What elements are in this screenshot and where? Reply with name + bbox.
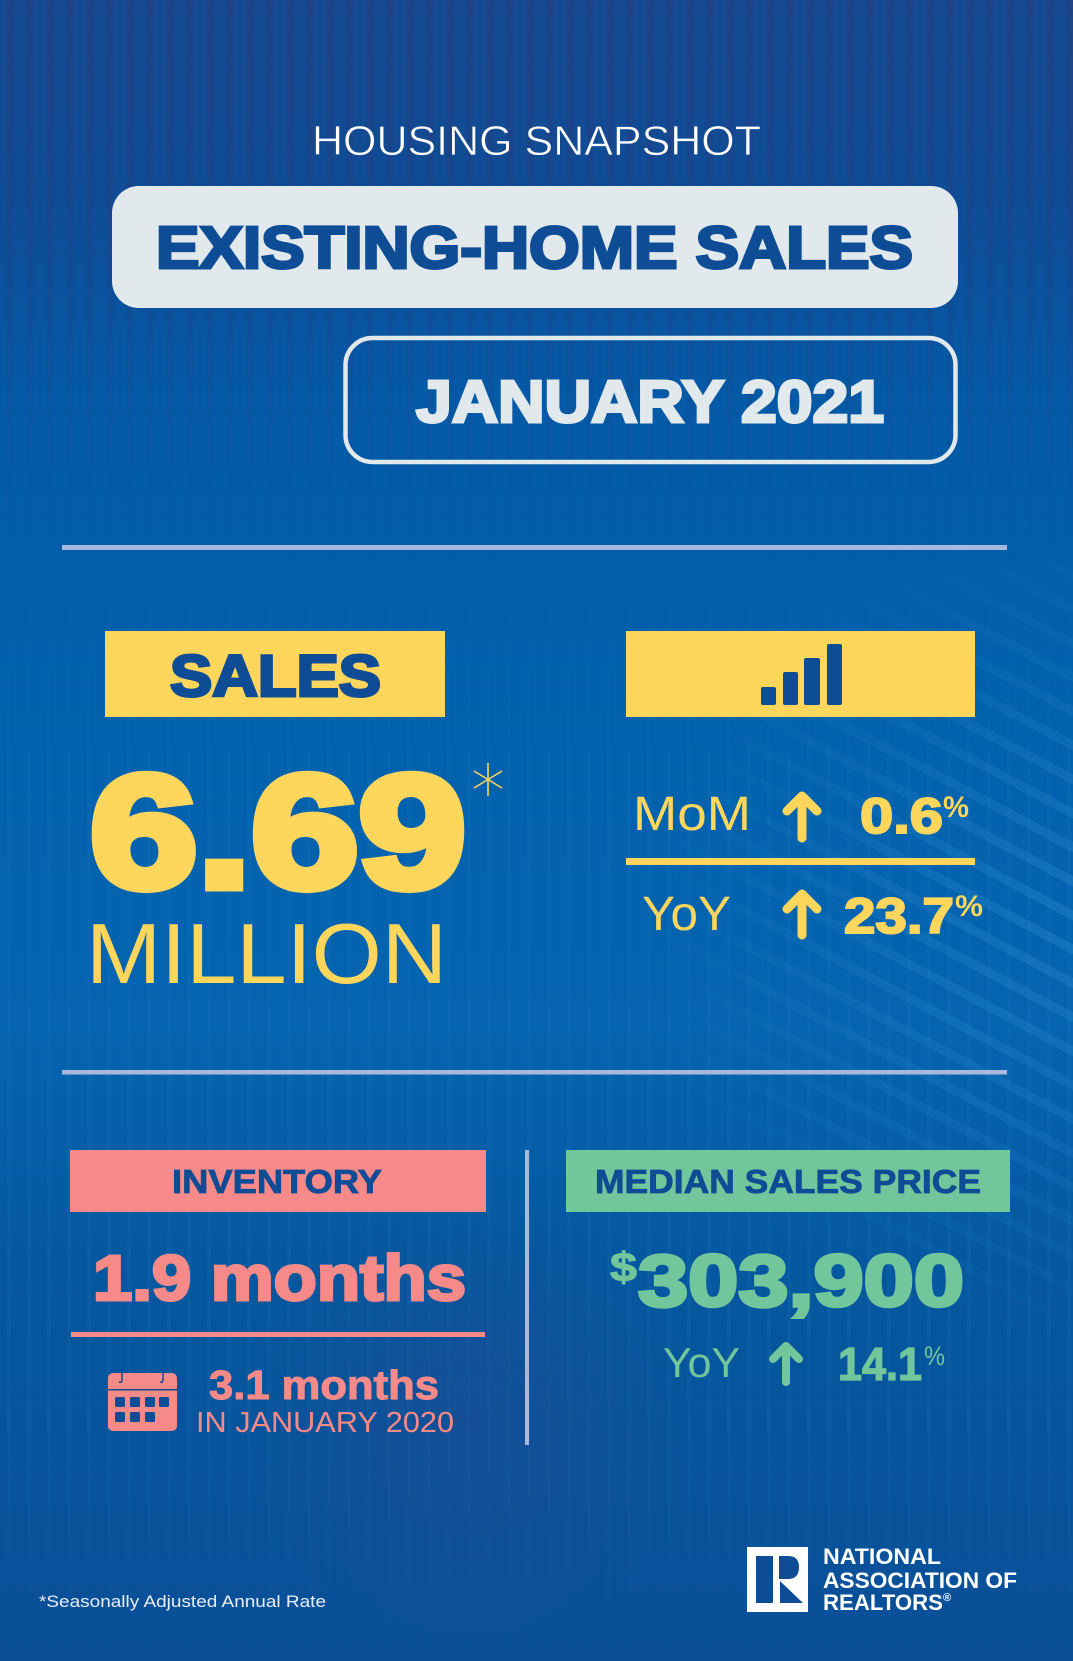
footnote: *Seasonally Adjusted Annual Rate bbox=[39, 1593, 326, 1611]
prior year value: 3.1 months bbox=[209, 1362, 439, 1408]
title pill: existing-home sales bbox=[112, 186, 958, 308]
sales label: SALES bbox=[170, 644, 381, 709]
date pill: january 2021: JANUARY 2021 bbox=[416, 369, 884, 435]
yoy row: 14.1 bbox=[838, 1338, 922, 1390]
prior year label: IN JANUARY 2020 bbox=[196, 1407, 454, 1439]
mom row: MoM bbox=[633, 788, 751, 841]
yoy row: YoY bbox=[642, 888, 731, 941]
divider middle bbox=[62, 1070, 1007, 1074]
heading: housing snapshot: HOUSING SNAPSHOT bbox=[312, 117, 761, 164]
median price label: MEDIAN SALES PRICE bbox=[595, 1163, 981, 1200]
yoy row bbox=[642, 888, 983, 944]
median price label bbox=[566, 1150, 1010, 1212]
sales value: 6.69 bbox=[90, 742, 466, 921]
panel: sales bbox=[86, 631, 502, 1002]
yoy row: % bbox=[955, 890, 983, 923]
inventory value: 1.9 months bbox=[93, 1242, 466, 1314]
icon: calendar bbox=[108, 1371, 177, 1431]
rule bbox=[71, 1332, 485, 1337]
yoy row: YoY bbox=[663, 1339, 740, 1386]
title pill: existing-home sales: EXISTING-HOME SALES bbox=[156, 215, 913, 281]
wordmark: ® bbox=[943, 1592, 951, 1604]
yoy row bbox=[663, 1338, 945, 1390]
vertical divider bbox=[525, 1150, 529, 1445]
panel: inventory bbox=[70, 1150, 486, 1439]
chart icon box bbox=[626, 631, 975, 717]
million label: MILLION bbox=[86, 907, 447, 1002]
panel: median sales price bbox=[566, 1150, 1010, 1390]
asterisk bbox=[474, 763, 502, 796]
date pill: january 2021 bbox=[346, 338, 956, 462]
dollar sign: $ bbox=[610, 1244, 637, 1290]
mom row: 0.6 bbox=[860, 788, 943, 844]
divider top bbox=[62, 545, 1007, 550]
mom row: % bbox=[943, 791, 969, 824]
icon: realtor r bbox=[747, 1547, 808, 1612]
panel: change rates bbox=[626, 631, 983, 944]
wordmark: REALTORS bbox=[823, 1590, 943, 1615]
yoy row: 23.7 bbox=[844, 888, 954, 944]
price value: 303,900 bbox=[638, 1241, 964, 1322]
sales label bbox=[105, 631, 445, 717]
yoy row: % bbox=[924, 1341, 945, 1371]
wordmark: ASSOCIATION OF bbox=[823, 1568, 1017, 1593]
inventory label bbox=[70, 1150, 486, 1212]
logo: national association of realtors bbox=[747, 1544, 1017, 1615]
wordmark bbox=[823, 1544, 1017, 1615]
inventory label: INVENTORY bbox=[172, 1163, 382, 1200]
rule bbox=[626, 858, 975, 865]
mom row bbox=[633, 788, 969, 844]
wordmark: NATIONAL bbox=[823, 1544, 941, 1569]
